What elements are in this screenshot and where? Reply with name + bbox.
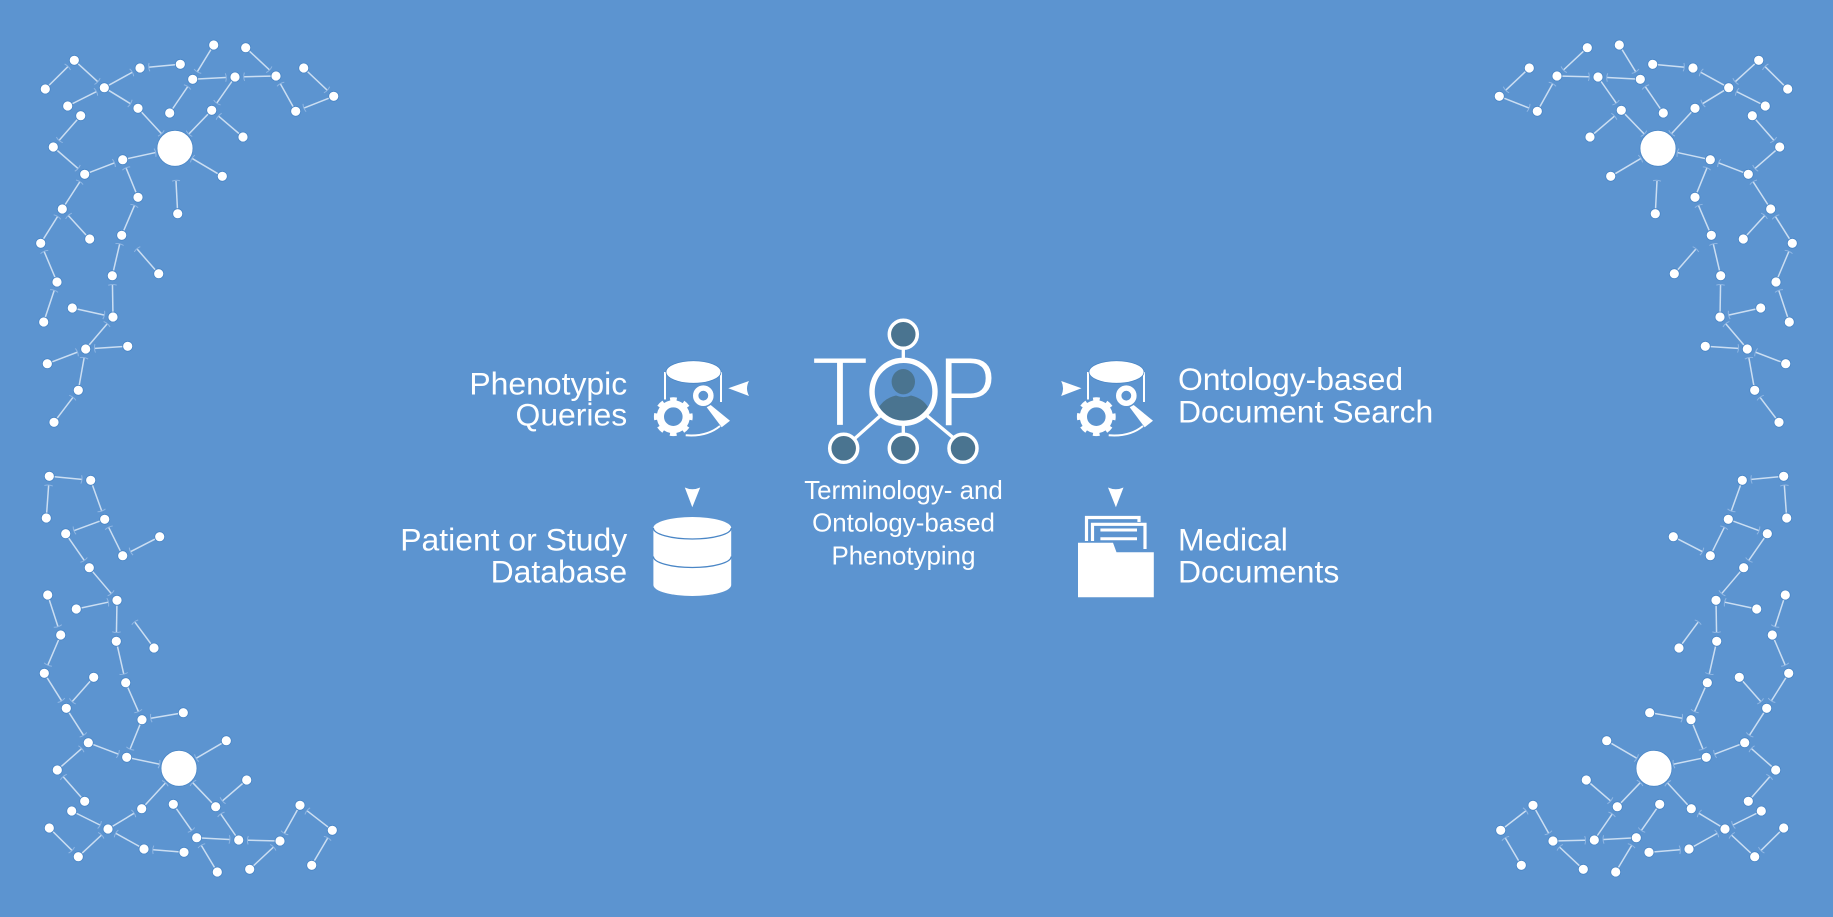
caption: Terminology- and Ontology-based Phenotyping: Phenotyping bbox=[832, 542, 975, 570]
network: bottom-left corner bbox=[39, 471, 337, 877]
arrow: logo to phenotypic queries bbox=[728, 381, 749, 396]
logo connectors bbox=[855, 349, 953, 438]
icon: phenotypic query database bbox=[656, 361, 730, 436]
network: top-right corner bbox=[1494, 40, 1797, 427]
label: Medical Documents: Medical bbox=[1178, 522, 1288, 558]
label: Patient or Study Database: Database bbox=[491, 554, 627, 590]
TOP logo bbox=[810, 320, 998, 462]
label: Phenotypic Queries: Queries bbox=[516, 396, 627, 432]
label: Ontology-based Document Search: Ontology-based bbox=[1178, 361, 1403, 397]
label: Medical Documents: Documents bbox=[1178, 554, 1339, 590]
label: Patient or Study Database: Patient or Study bbox=[400, 522, 627, 558]
network: bottom-right corner bbox=[1496, 471, 1794, 877]
caption: Terminology- and Ontology-based Phenotyping: Terminology- and bbox=[804, 477, 1003, 505]
logo letter P: P bbox=[937, 336, 998, 449]
arrow: logo to document search bbox=[1061, 381, 1082, 396]
logo nodes bbox=[830, 320, 977, 462]
icon: ontology-based document search bbox=[1079, 361, 1153, 436]
arrow: document search to medical documents bbox=[1108, 488, 1124, 507]
caption: Terminology- and Ontology-based Phenotyping: Ontology-based bbox=[812, 510, 995, 538]
logo letter T: T bbox=[810, 335, 870, 448]
network: top-left corner bbox=[36, 40, 339, 427]
icon: patient or study database bbox=[653, 517, 731, 596]
icon: folder with documents bbox=[1078, 518, 1154, 597]
label: Phenotypic Queries: Phenotypic bbox=[469, 365, 627, 401]
label: Ontology-based Document Search: Document Search bbox=[1178, 393, 1433, 429]
arrow: phenotypic queries to database bbox=[685, 488, 700, 507]
logo O ring with person bbox=[872, 360, 935, 424]
